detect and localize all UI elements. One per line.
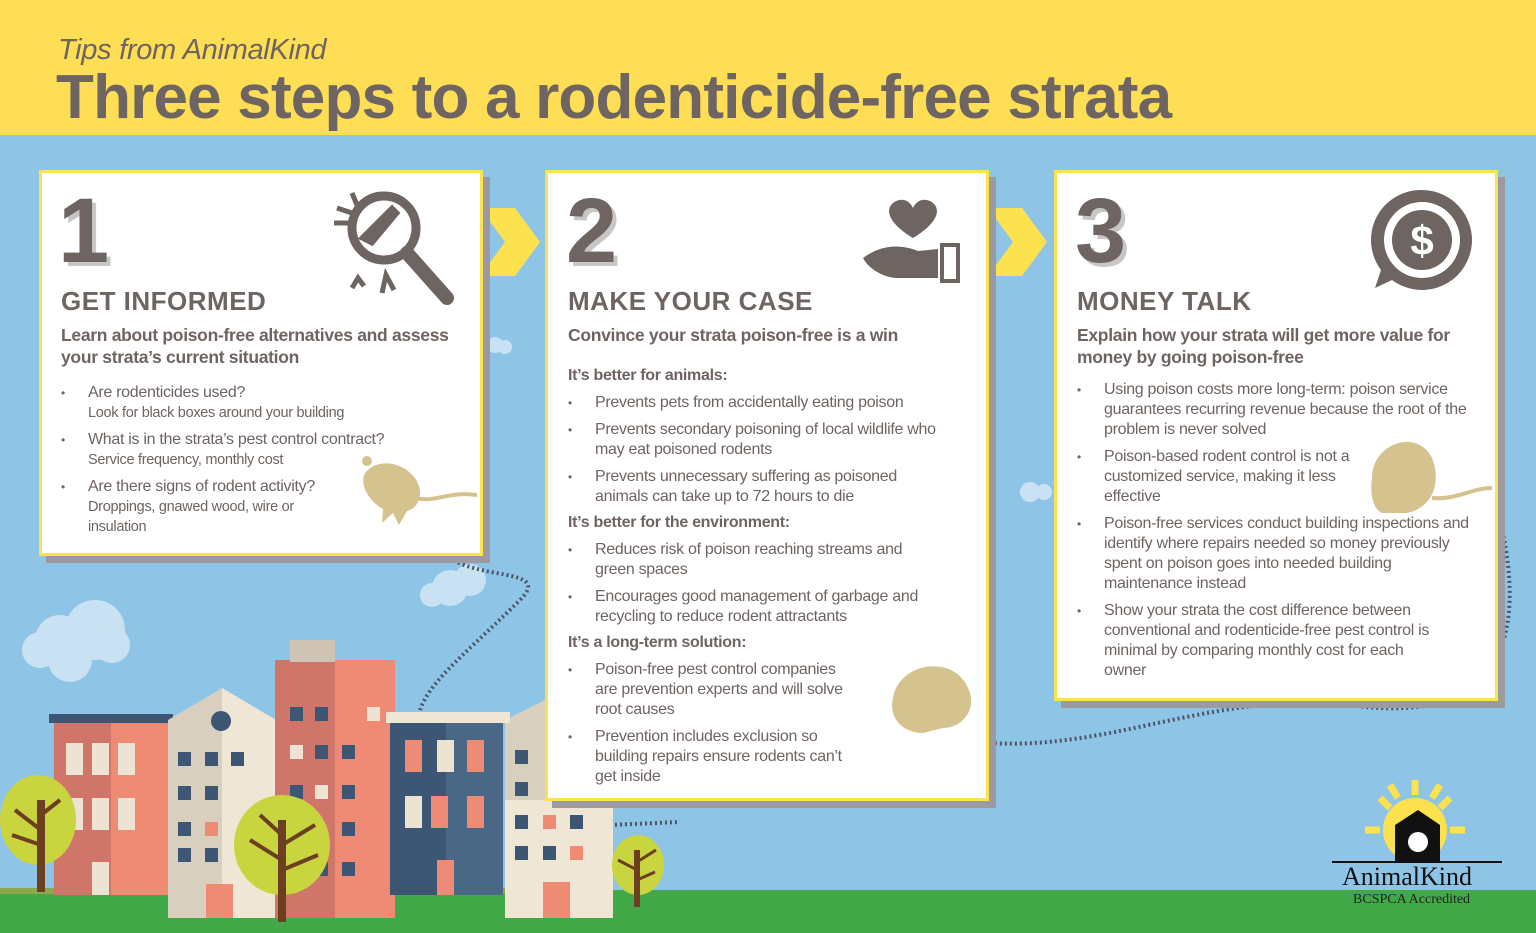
icon: dollar bubble	[1371, 190, 1472, 290]
buildings	[54, 720, 168, 895]
header band	[0, 0, 1536, 135]
panel 3: MONEY TALK	[1077, 286, 1251, 316]
panel 2	[545, 170, 989, 801]
panel 2: Poison-free pest control companies are prevention experts and will solve root causes	[595, 661, 843, 718]
panel 3: Show your strata the cost difference between conventional and rodenticide-free pest control is minimal by comparing monthly cost for each owner	[1104, 602, 1429, 679]
title: Three steps to a rodenticide-free strata	[56, 63, 1171, 132]
panel 2: Encourages good management of garbage and recycling to reduce rodent attractants	[595, 588, 918, 625]
panel 2: Prevents unnecessary suffering as poisoned animals can take up to 72 hours to die	[595, 468, 897, 505]
panel 2: 2	[566, 180, 617, 282]
icon: rat	[1371, 442, 1492, 513]
panel 1: Learn about poison-free alternatives and assess your strata’s current situation	[61, 325, 449, 367]
icon: magnifier	[334, 192, 454, 305]
panel 3: Explain how your strata will get more value for money by going poison-free	[1077, 325, 1450, 367]
logo: AnimalKind	[1332, 780, 1502, 907]
panel 1: Are rodenticides used?	[88, 384, 245, 401]
panel 2: Reduces risk of poison reaching streams and green spaces	[595, 541, 902, 578]
panel 3: 3	[1075, 180, 1126, 282]
logo: AnimalKind: AnimalKind	[1342, 862, 1472, 891]
panel 1: Look for black boxes around your building	[88, 405, 344, 421]
panel 2: Convince your strata poison-free is a win	[568, 325, 898, 345]
panel 2: Prevents pets from accidentally eating poison	[595, 394, 903, 411]
panel 2: Prevents secondary poisoning of local wildlife who may eat poisoned rodents	[595, 421, 936, 458]
panel 2: It’s a long-term solution:	[568, 634, 746, 651]
panel 1: What is in the strata’s pest control contract?	[88, 431, 384, 448]
panel 2: Prevention includes exclusion so building repairs ensure rodents can’t get inside	[595, 728, 842, 785]
panel 2: It’s better for the environment:	[568, 514, 790, 531]
arrows between panels	[480, 208, 540, 276]
panel 2: It’s better for animals:	[568, 367, 727, 384]
subtitle: Tips from AnimalKind	[58, 34, 326, 66]
panel 1: Droppings, gnawed wood, wire or insulation	[88, 499, 294, 535]
panel 1	[39, 170, 483, 556]
trees	[0, 775, 76, 892]
panel 3: Using poison costs more long-term: poison service guarantees recurring revenue because the root of the problem is never solved	[1104, 381, 1466, 438]
icon: heart in hand	[863, 200, 960, 283]
logo: AnimalKind: BCSPCA Accredited	[1353, 892, 1470, 907]
panel 1: GET INFORMED	[61, 286, 266, 316]
icon: dollar bubble: $	[1410, 217, 1434, 264]
panel 1: Service frequency, monthly cost	[88, 452, 283, 468]
icon: mouse	[892, 666, 972, 733]
panel 3: Poison-free services conduct building inspections and identify where repairs needed so money previously spent on poison goes into needed building maintenance instead	[1104, 515, 1469, 592]
panel 3	[1054, 170, 1498, 701]
panel 2: MAKE YOUR CASE	[568, 286, 813, 316]
panel 3: Poison-based rodent control is not a customized service, making it less effective	[1104, 448, 1349, 505]
icon: rat	[362, 456, 478, 525]
panel 1: 1	[58, 180, 109, 282]
panel 1: Are there signs of rodent activity?	[88, 478, 315, 495]
